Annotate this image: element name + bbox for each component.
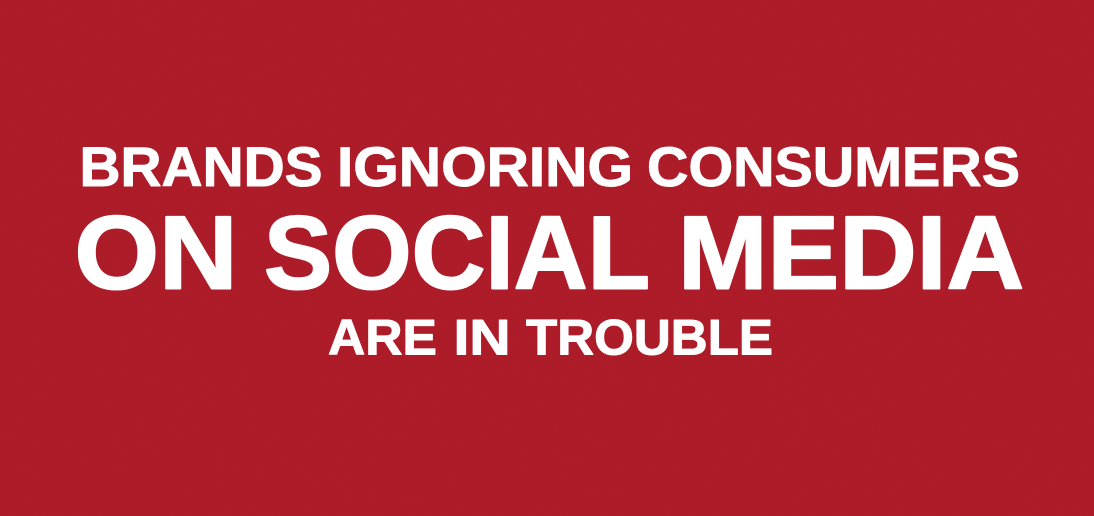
title line 3: ARE <box>328 310 437 366</box>
title line 3: IN <box>454 310 510 366</box>
title line 1: IGNORING <box>337 135 633 198</box>
title line 2: SOCIAL <box>264 196 650 312</box>
title line 1 <box>80 135 1020 198</box>
title <box>74 135 1024 366</box>
title line 1: CONSUMERS <box>647 135 1020 198</box>
title line 2: ON <box>74 196 238 312</box>
title line 3 <box>328 310 773 366</box>
title line 2: MEDIA <box>678 196 1024 312</box>
title line 1: BRANDS <box>80 135 322 198</box>
title line 2 <box>74 196 1024 312</box>
title line 3: TROUBLE <box>526 310 773 366</box>
